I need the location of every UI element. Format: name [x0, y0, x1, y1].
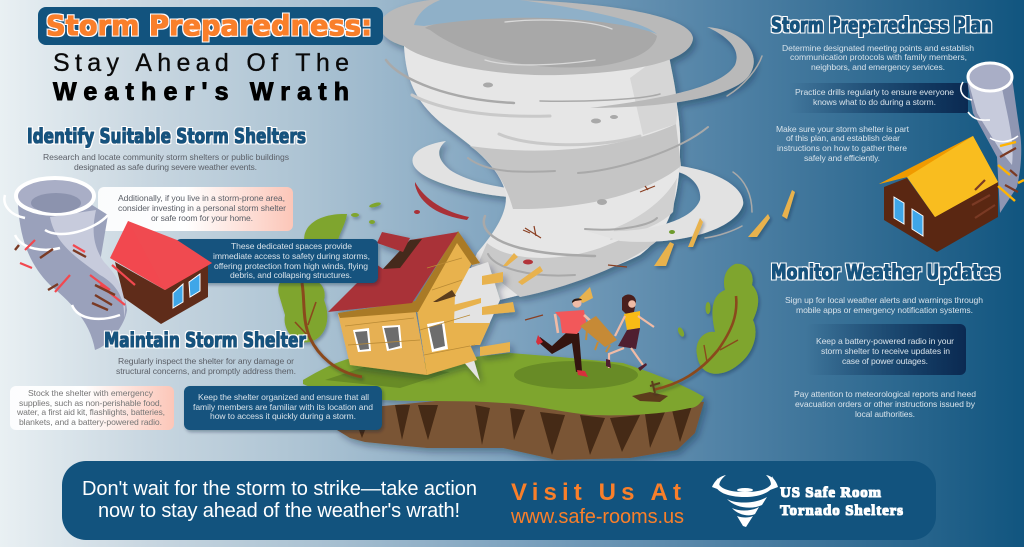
callout: dedicated spaces: immediate access to safety during storms, [213, 251, 370, 261]
intro text: communication protocols with family members, [790, 52, 967, 62]
wooden bench [580, 316, 617, 347]
callout: personal storm shelter: or safe room for your home. [151, 213, 253, 223]
tornado funnel [404, 46, 680, 300]
intro text: Regularly inspect the shelter for any damage or [118, 356, 294, 366]
heading: Maintain Storm Shelter [104, 328, 306, 352]
visit us text: Visit Us At [511, 479, 681, 506]
tornado ring opening [414, 0, 657, 34]
callout: personal storm shelter: Additionally, if you live in a storm-prone area, [118, 193, 285, 203]
callout: dedicated spaces: offering protection from high winds, flying [214, 261, 368, 271]
panel: storm preparedness plan: knows what to do during a storm. [813, 97, 936, 107]
orange house debris [998, 142, 1024, 201]
intro text: Sign up for local weather alerts and warnings through [785, 295, 983, 305]
fallen dirt [632, 392, 668, 402]
illustration: large tornado [380, 0, 754, 300]
right tornado mouth [968, 63, 1012, 91]
tornado lower band [478, 232, 660, 297]
swirl arm right [590, 27, 754, 108]
siding lines [345, 258, 475, 355]
island soil [337, 395, 704, 460]
icon: running woman [580, 295, 654, 371]
red house roof [110, 221, 212, 290]
house left wall [338, 308, 427, 375]
house roof [328, 232, 458, 312]
tornado top ring [380, 0, 693, 75]
panel: monitor weather updates: case of power outages. [842, 356, 928, 366]
callout: emergency supplies: blankets, and a battery-powered radio. [19, 417, 162, 427]
callout: keep shelter organized: family members are familiar with its location and [193, 402, 373, 412]
icon: left tree [278, 202, 381, 377]
tornado streaks [386, 20, 762, 276]
panel: monitor weather updates: storm shelter to receive updates in [821, 346, 950, 356]
closing text: safely and efficiently. [804, 153, 880, 163]
tornado lower arm right [583, 166, 743, 242]
callout: keep shelter organized [184, 386, 382, 430]
intro text: Research and locate community storm shelters or public buildings [43, 152, 289, 162]
panel: monitor weather updates [771, 260, 1000, 419]
intro text: Determine designated meeting points and establish [782, 43, 974, 53]
panel: identify suitable storm shelters [27, 124, 306, 172]
intro text: structural concerns, and promptly address them. [116, 366, 296, 376]
callout: dedicated spaces: These dedicated spaces provide [231, 241, 352, 251]
tornado lower arm left [412, 141, 587, 198]
small tornado debris [20, 240, 135, 305]
icon: small tornado with orange house [879, 63, 1024, 252]
intro text: mobile apps or emergency notification systems. [796, 305, 973, 315]
house gable wall [417, 242, 490, 375]
small tornado funnel [18, 205, 127, 350]
logo: tornado [712, 475, 778, 527]
icon: main house [328, 231, 515, 381]
house windows [353, 321, 448, 352]
small tornado mouth [16, 178, 94, 214]
icon: flying debris [414, 82, 795, 320]
torn funnel behind planks [450, 262, 500, 381]
closing text: evacuation orders or other instructions issued by [795, 399, 976, 409]
intro text: neighbors, and emergency services. [811, 62, 945, 72]
red house windows [173, 274, 200, 308]
red house walls [115, 262, 208, 324]
panel: monitor weather updates: Keep a battery-powered radio in your [816, 336, 954, 346]
website: www.safe-rooms.us [510, 506, 684, 528]
roof hole [383, 239, 422, 269]
closing text: of this plan, and establish clear [786, 133, 900, 143]
panel: storm preparedness plan: Practice drills regularly to ensure everyone [795, 87, 954, 97]
callout: emergency supplies: Stock the shelter with emergency [28, 388, 154, 398]
logo text: Tornado Shelters [780, 503, 903, 519]
callout: keep shelter organized: how to access it quickly during a storm. [210, 411, 356, 421]
call to action text: now to stay ahead of the weather's wrath! [98, 500, 460, 522]
callout: emergency supplies: supplies, such as non-perishable food, [19, 398, 162, 408]
panel: storm preparedness plan [771, 13, 992, 163]
closing text: Make sure your storm shelter is part [776, 124, 910, 134]
logo text: US Safe Room [780, 485, 882, 501]
island grass [303, 353, 704, 415]
orange house walls [884, 178, 998, 252]
callout: keep shelter organized: Keep the shelter organized and ensure that all [198, 392, 369, 402]
icon: right tree [650, 264, 758, 393]
intro text: designated as safe during severe weather events. [74, 162, 257, 172]
callout: emergency supplies [10, 386, 174, 430]
callout: dedicated spaces: debris, and collapsing structures. [230, 270, 352, 280]
callout: personal storm shelter [98, 187, 293, 231]
roof fragment [377, 232, 410, 252]
right tornado funnel [967, 77, 1021, 213]
title pill [38, 7, 383, 45]
footer bar [62, 461, 936, 540]
house roof trim [338, 231, 480, 318]
callout: personal storm shelter: consider investing in a personal storm shelter [118, 203, 286, 213]
icon: running man [536, 298, 596, 377]
callout: practice drills [788, 83, 968, 113]
closing text: Pay attention to meteorological reports and heed [794, 389, 976, 399]
icon: small tornado with red house [4, 178, 212, 350]
icon: floating island [303, 353, 704, 460]
orange house windows [894, 197, 923, 236]
panel: footer call to action [62, 461, 936, 540]
title line 3: Weather's Wrath [53, 78, 349, 106]
call to action text: Don't wait for the storm to strike—take action [82, 478, 477, 500]
callout: dedicated spaces [175, 239, 378, 283]
callout: emergency supplies: water, a first aid kit, flashlights, batteries, [16, 407, 165, 417]
title line 2: Stay Ahead Of The [53, 49, 349, 77]
orange house roof [879, 136, 998, 217]
closing text: instructions on how to gather there [777, 143, 907, 153]
closing text: local authorities. [855, 409, 915, 419]
broken planks [453, 272, 515, 356]
panel: maintain storm shelter [104, 328, 306, 376]
tornado mid band [470, 124, 681, 209]
panel: main title [38, 7, 383, 106]
callout: battery radio [806, 324, 966, 375]
heading: Identify Suitable Storm Shelters [27, 124, 306, 148]
title line 1: Storm Preparedness: [46, 9, 372, 42]
